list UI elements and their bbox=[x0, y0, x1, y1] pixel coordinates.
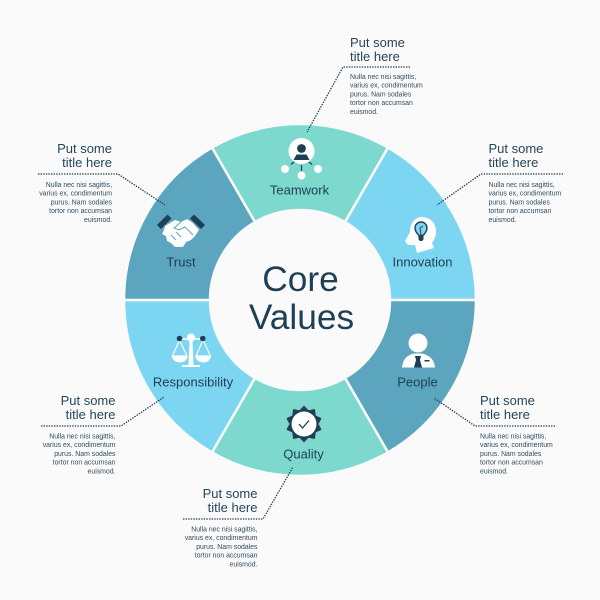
callout: upper left bbox=[38, 141, 165, 224]
donut ring bbox=[124, 124, 476, 476]
callout: upper left: euismod. bbox=[84, 217, 112, 224]
callout: lower left: euismod. bbox=[88, 468, 116, 475]
label: People: People bbox=[397, 374, 438, 390]
callout: lower right: purus. Nam sodales bbox=[480, 451, 542, 458]
label: Trust: Trust bbox=[166, 254, 196, 270]
label: Teamwork: Teamwork bbox=[270, 182, 330, 198]
callout: upper left: purus. Nam sodales bbox=[51, 199, 113, 206]
callout: upper left: Nulla nec nisi sagittis, bbox=[46, 182, 112, 189]
callout: lower left: Nulla nec nisi sagittis, bbox=[49, 434, 116, 440]
callout: top: euismod. bbox=[350, 109, 378, 116]
callout: bottom: euismod. bbox=[230, 561, 258, 568]
callout: bottom: tortor non accumsan bbox=[195, 553, 258, 560]
icon: innovation head bbox=[405, 217, 436, 253]
callout: bottom bbox=[183, 467, 293, 568]
center title: Core bbox=[262, 260, 339, 299]
label: Innovation: Innovation bbox=[392, 254, 452, 270]
callout: upper right: title here bbox=[488, 155, 538, 170]
segment: People bbox=[345, 300, 476, 452]
callout: lower right: title here bbox=[480, 407, 530, 422]
callout: bottom: varius ex, condimentum bbox=[185, 535, 258, 542]
callout: upper right: purus. Nam sodales bbox=[488, 199, 550, 206]
segment: Responsibility bbox=[124, 300, 255, 452]
callout: lower left: tortor non accumsan bbox=[53, 460, 116, 467]
callout: upper right bbox=[437, 141, 563, 224]
callout: lower right: Nulla nec nisi sagittis, bbox=[480, 434, 546, 440]
callout: upper right: tortor non accumsan bbox=[488, 208, 551, 215]
callout: bottom: Nulla nec nisi sagittis, bbox=[191, 526, 258, 534]
callout: upper right: Nulla nec nisi sagittis, bbox=[488, 182, 555, 189]
center title bbox=[249, 260, 354, 337]
label: Quality: Quality bbox=[283, 446, 324, 462]
callout: bottom: title here bbox=[208, 500, 258, 515]
callout: lower left: title here bbox=[66, 407, 116, 422]
segment: Trust bbox=[124, 148, 255, 300]
callout: top: Nulla nec nisi sagittis, bbox=[350, 74, 416, 81]
callout: top: Put some bbox=[350, 35, 405, 50]
callout: top: purus. Nam sodales bbox=[350, 91, 412, 98]
label: Responsibility: Responsibility bbox=[153, 374, 234, 390]
callout: lower left bbox=[41, 393, 164, 475]
callout: lower left: varius ex, condimentum bbox=[43, 442, 116, 449]
icon: teamwork bbox=[281, 138, 322, 180]
callout: upper left: tortor non accumsan bbox=[49, 208, 112, 215]
callout: lower right: varius ex, condimentum bbox=[480, 442, 553, 449]
icon: people bbox=[402, 334, 435, 368]
callout: top: varius ex, condimentum bbox=[350, 83, 423, 90]
callout: lower right: euismod. bbox=[480, 468, 508, 475]
callout: bottom: Put some bbox=[203, 486, 258, 501]
icon: scales bbox=[172, 334, 211, 367]
callout: upper left: Put some bbox=[57, 141, 112, 156]
callout: lower left: Put some bbox=[61, 393, 116, 408]
segment: Quality bbox=[212, 378, 388, 476]
center title: Values bbox=[249, 298, 354, 337]
callout: top: title here bbox=[350, 49, 400, 64]
callout: upper right: Put some bbox=[488, 141, 543, 156]
callout: lower right bbox=[434, 393, 555, 475]
segment: Innovation bbox=[345, 148, 476, 300]
callout: lower left: purus. Nam sodales bbox=[54, 451, 116, 458]
callout: upper left: title here bbox=[62, 155, 112, 170]
callout: top: tortor non accumsan bbox=[350, 100, 413, 107]
callout: upper right: euismod. bbox=[488, 217, 517, 224]
callout: lower right: tortor non accumsan bbox=[480, 460, 543, 467]
callout: bottom: purus. Nam sodales bbox=[196, 544, 258, 551]
segment: Teamwork bbox=[212, 124, 388, 222]
icon: handshake bbox=[157, 214, 205, 247]
callout: upper right: varius ex, condimentum bbox=[488, 191, 562, 198]
callout: top bbox=[307, 35, 423, 132]
callout: lower right: Put some bbox=[480, 393, 535, 408]
callout: upper left: varius ex, condimentum bbox=[39, 191, 112, 198]
icon: quality badge bbox=[286, 406, 322, 442]
